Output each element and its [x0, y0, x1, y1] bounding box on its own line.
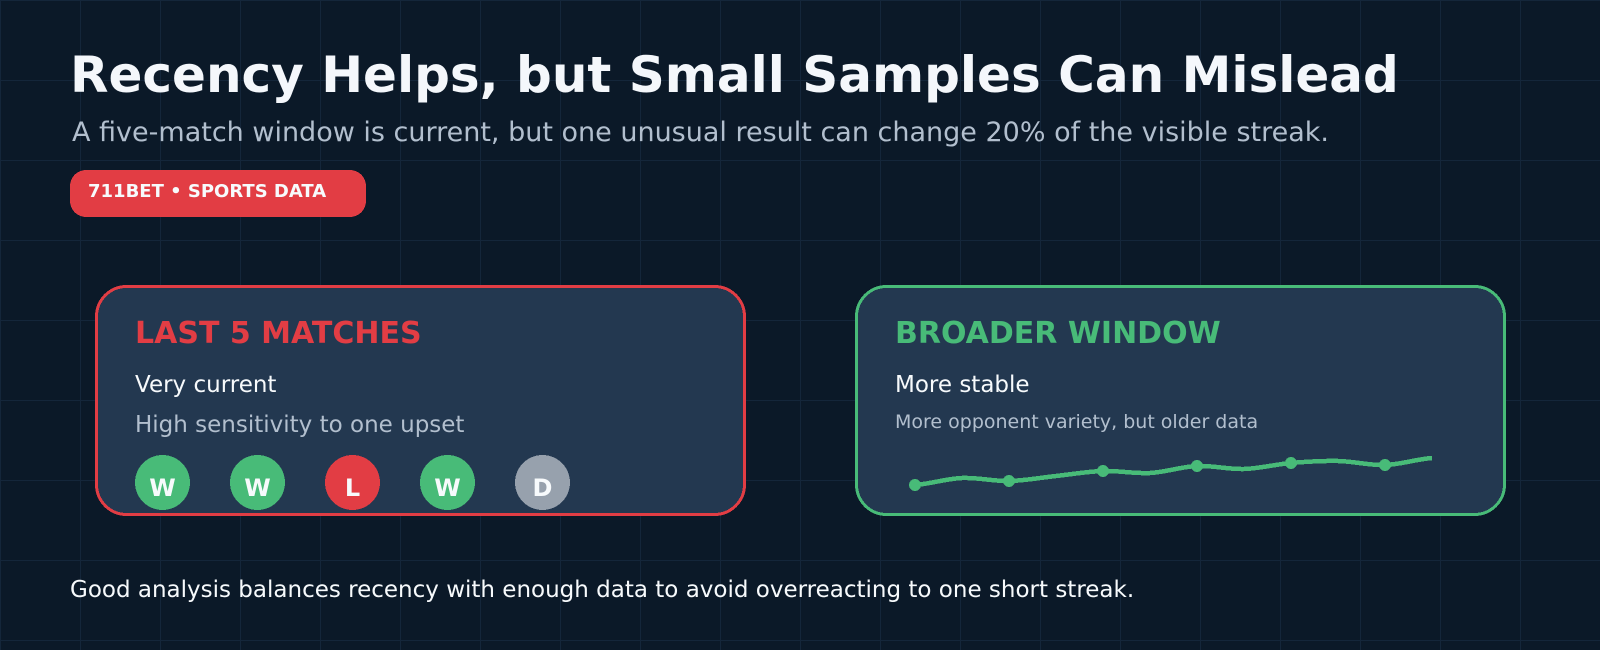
result: win: W	[434, 474, 461, 502]
line chart: stable trend	[909, 457, 1432, 491]
result: win	[420, 455, 475, 510]
panel: broader window	[856, 286, 1504, 514]
result: win: W	[149, 474, 176, 502]
result: loss: L	[345, 474, 360, 502]
result: win: W	[244, 474, 271, 502]
result: draw	[515, 455, 570, 510]
footer takeaway: Good analysis balances recency with enough data to avoid overreacting to one short streak.	[70, 577, 1134, 603]
text: opponent variety: More opponent variety, but older data	[895, 411, 1258, 433]
text: more stable: More stable	[895, 372, 1030, 398]
result: win	[230, 455, 285, 510]
panel heading: broader window: BROADER WINDOW	[895, 316, 1221, 351]
result: win	[135, 455, 190, 510]
badge	[70, 170, 366, 217]
result: draw: D	[533, 474, 552, 502]
subtitle: A five-match window is current, but one unusual result can change 20% of the visible streak.	[72, 117, 1329, 148]
result: loss	[325, 455, 380, 510]
badge: 711BET • SPORTS DATA	[88, 181, 326, 202]
text: high sensitivity: High sensitivity to one upset	[135, 412, 464, 438]
panel: last 5 matches	[96, 286, 744, 514]
text: very current: Very current	[135, 372, 276, 398]
panel heading: last 5 matches: LAST 5 MATCHES	[135, 316, 422, 351]
title: Recency Helps, but Small Samples Can Mislead	[70, 46, 1399, 104]
